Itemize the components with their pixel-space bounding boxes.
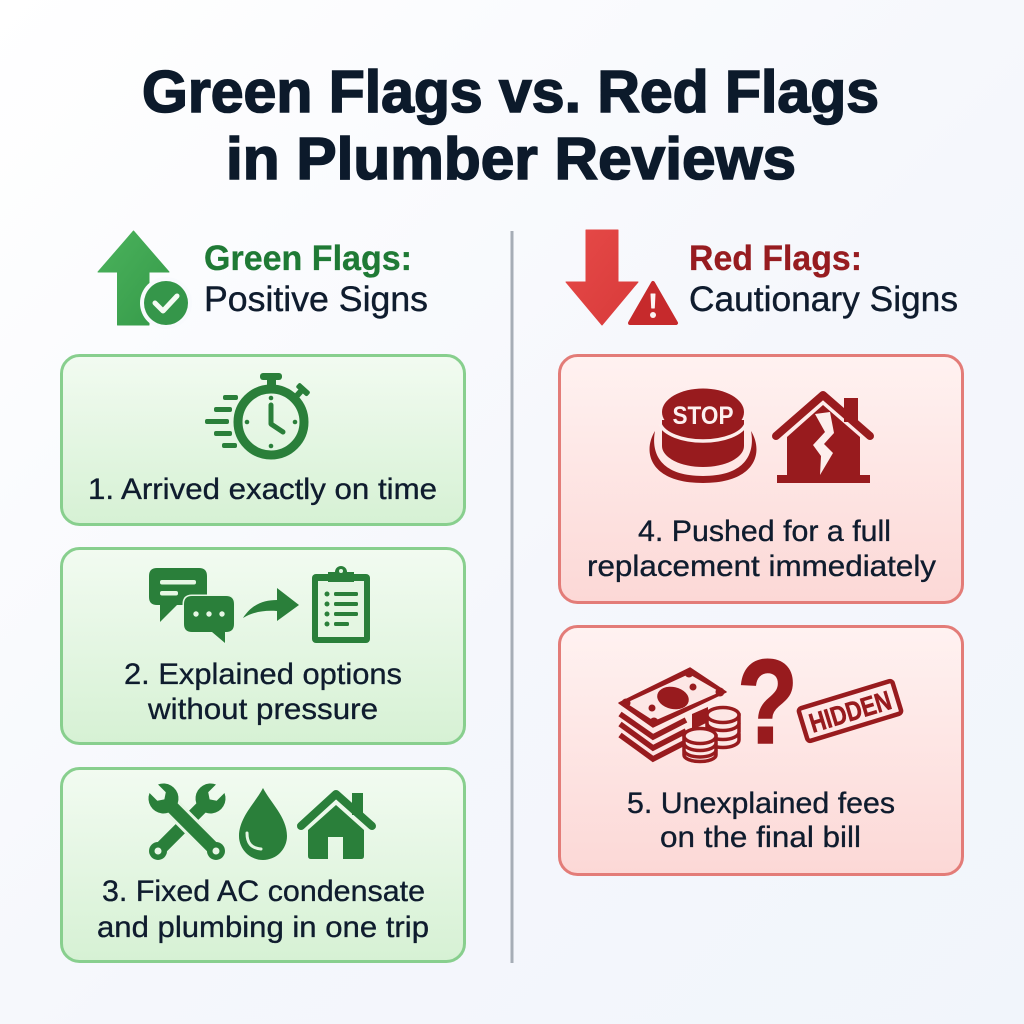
label 3 [97, 875, 429, 944]
icon: green up arrow with check badge [98, 231, 192, 329]
subheading: Positive Signs: Positive Signs [204, 280, 428, 319]
icon: cash stack and coins [619, 668, 739, 762]
panel: red flag 4 [560, 356, 962, 602]
label 2: 2. Explained options [124, 658, 402, 691]
icon: hidden stamp: HIDDEN [806, 685, 895, 739]
label 5 [627, 787, 895, 854]
label 3: 3. Fixed AC condensate [102, 875, 425, 908]
panel: green flag 1 [62, 356, 464, 524]
icon: house [301, 793, 372, 859]
icon: speech bubbles [149, 568, 234, 643]
label 1: 1. Arrived exactly on time [88, 473, 437, 506]
label 4: 4. Pushed for a full [638, 515, 891, 548]
icon: cracked house [776, 395, 870, 483]
red column header [566, 230, 958, 325]
panel: red flag 5 [560, 626, 962, 874]
label 4: replacement immediately [587, 550, 936, 583]
icon: clipboard [312, 566, 370, 643]
icon: stop button [650, 388, 756, 483]
label 2 [124, 658, 402, 726]
label 5: 5. Unexplained fees [627, 787, 895, 820]
label 4 [587, 515, 936, 583]
icon: crossed wrenches [141, 778, 233, 868]
title: in Plumber Reviews [226, 126, 796, 192]
subheading: Cautionary Signs: Cautionary Signs [689, 280, 958, 319]
icon: question mark: ? [737, 635, 798, 769]
icon: stop button: STOP [672, 402, 734, 430]
label 3: and plumbing in one trip [97, 911, 429, 944]
label 5: on the final bill [660, 821, 861, 854]
icon: water drop [239, 788, 287, 860]
heading: Red Flags: Red Flags: [689, 239, 862, 278]
icon: stopwatch [205, 373, 311, 455]
icon: red down arrow with warning triangle [566, 230, 676, 325]
title [142, 59, 879, 192]
icon: curved arrow [243, 588, 299, 621]
green column header [98, 231, 428, 329]
center divider line [510, 231, 514, 963]
title: Green Flags vs. Red Flags [142, 59, 879, 125]
panel: green flag 2 [62, 548, 464, 744]
label 2: without pressure [147, 693, 378, 726]
panel: green flag 3 [62, 768, 464, 962]
heading: Green Flags: Green Flags: [204, 239, 412, 278]
